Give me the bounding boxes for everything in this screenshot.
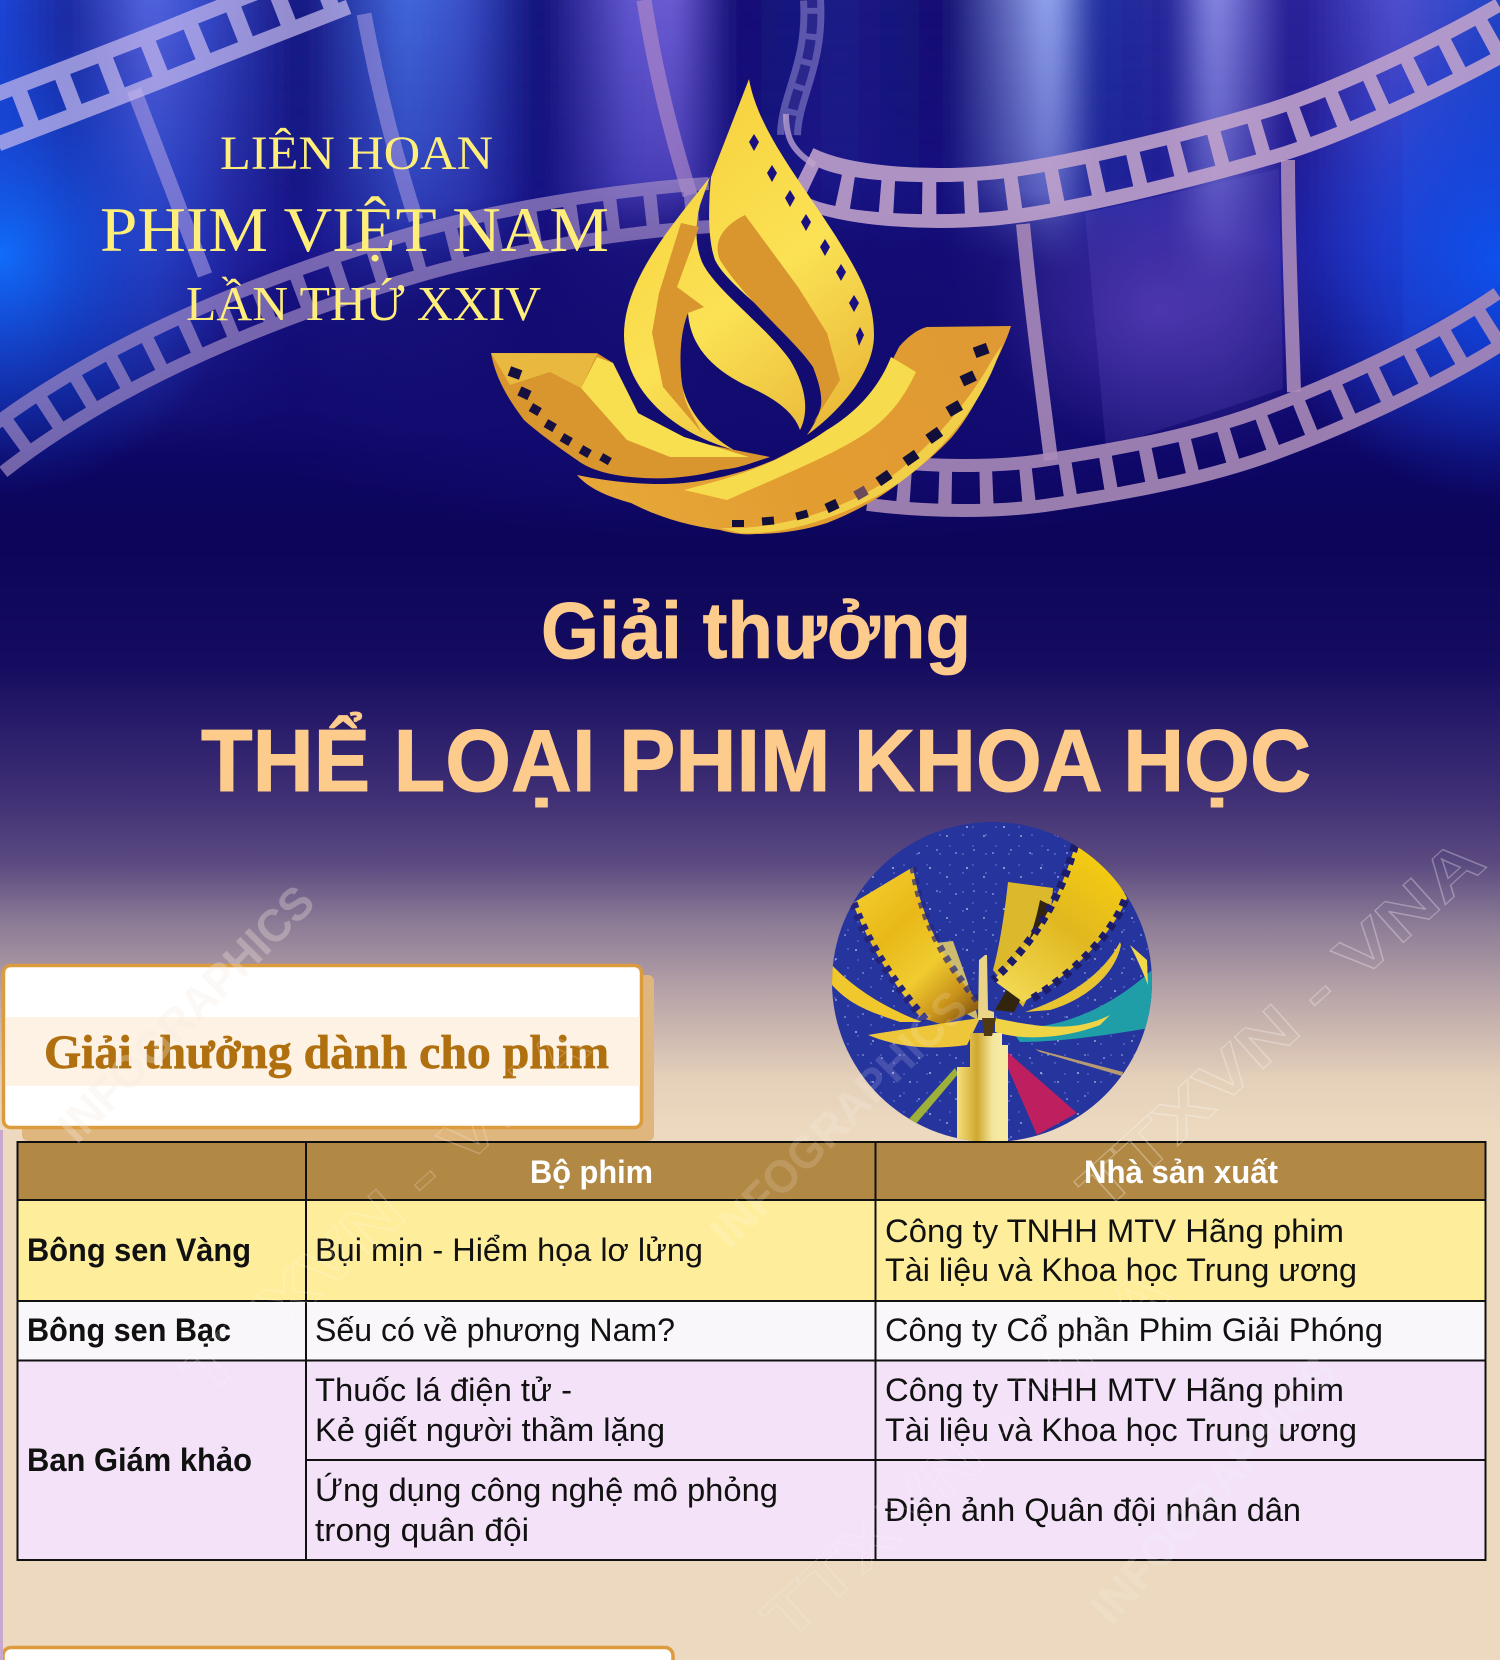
heading band — [6, 1017, 640, 1086]
watermark: INFOGRAPHICS and TTXVN - VNA: INFOGRAPHICS — [47, 875, 324, 1152]
red light beam — [1008, 1052, 1077, 1135]
green light beam — [908, 1068, 958, 1125]
watermark: INFOGRAPHICS and TTXVN - VNA: TTXVN - VNA — [750, 1255, 1183, 1654]
festival name text — [100, 127, 609, 331]
panel shadow — [22, 975, 654, 1141]
row: Ban Giám khảo: Thuốc lá điện tử - — [315, 1372, 572, 1408]
row: Bông sen Bạc — [17, 1301, 1486, 1360]
left lotus petal — [491, 353, 770, 478]
teal ribbon — [1010, 970, 1155, 1042]
watermark: INFOGRAPHICS and TTXVN - VNA: INFOGRAPHICS — [1080, 1346, 1346, 1633]
banner: film festival curtain with film strips — [0, 0, 1500, 580]
lower left film wing — [868, 1018, 980, 1048]
row: Bông sen Vàng: Bông sen Vàng — [27, 1232, 251, 1268]
bottom and right lotus petal — [577, 326, 1011, 534]
row: Ban Giám khảo: Kẻ giết người thầm lặng — [315, 1412, 665, 1448]
row: Bông sen Vàng: Công ty TNHH MTV Hãng phim — [885, 1213, 1344, 1249]
big left film — [853, 867, 983, 1025]
panel box — [4, 966, 642, 1128]
watermark: INFOGRAPHICS and TTXVN - VNA — [47, 825, 1498, 1654]
watermark: INFOGRAPHICS and TTXVN - VNA: INFOGRAPHICS — [700, 980, 977, 1257]
small right film — [993, 882, 1053, 1007]
icon: golden lotus festival logo — [491, 79, 1011, 534]
row: Bông sen Vàng — [17, 1200, 1486, 1301]
brown streak — [1035, 1049, 1123, 1076]
table header row: Bộ phim — [530, 1154, 653, 1190]
left edge strip — [0, 1130, 3, 1660]
flame left petal — [624, 177, 805, 450]
panel: awards section heading — [4, 966, 654, 1141]
illustration: film flower tower circle — [830, 820, 1155, 1145]
panel: next section box cut off at bottom — [3, 1648, 673, 1660]
row: Ban Giám khảo: Ban Giám khảo — [27, 1442, 252, 1478]
left film band — [832, 965, 922, 1022]
heading: LIÊN HOAN: LIÊN HOAN — [220, 127, 493, 180]
row: Bông sen Bạc: Bông sen Bạc — [27, 1312, 231, 1348]
flame right petal — [709, 79, 874, 435]
tower — [957, 955, 1008, 1143]
table header row — [17, 1142, 1486, 1200]
heading: LẦN THỨ XXIV: LẦN THỨ XXIV — [186, 276, 541, 331]
big right film — [993, 845, 1127, 1002]
row: Ban Giám khảo: trong quân đội — [315, 1512, 529, 1548]
table header row: Nhà sản xuất — [1084, 1154, 1278, 1190]
row: Bông sen Bạc: Công ty Cổ phần Phim Giải Phóng — [885, 1312, 1383, 1348]
row: Ban Giám khảo: Tài liệu và Khoa học Trung ương — [885, 1412, 1357, 1448]
heading: PHIM VIỆT NAM: PHIM VIỆT NAM — [100, 194, 609, 265]
lower right film band — [1025, 942, 1121, 1012]
row: Ban Giám khảo: Điện ảnh Quân đội nhân dân — [885, 1492, 1301, 1528]
watermark: INFOGRAPHICS and TTXVN - VNA: TTXVN - VNA — [1065, 825, 1498, 1224]
table: awards winners — [17, 1142, 1486, 1560]
title: Giải thưởng: Giải thưởng — [541, 586, 971, 675]
title: THỂ LOẠI PHIM KHOA HỌC: THỂ LOẠI PHIM KHOA HỌC — [201, 711, 1311, 810]
small left film — [936, 941, 978, 1020]
row: Bông sen Vàng: Bụi mịn - Hiểm họa lơ lửng — [315, 1232, 703, 1268]
heading: Giải thưởng dành cho phim: Giải thưởng dành cho phim — [44, 1026, 609, 1079]
watermark: INFOGRAPHICS and TTXVN - VNA: TTXVN - VNA — [170, 1010, 603, 1409]
row: Ban Giám khảo: Ứng dụng công nghệ mô phỏng — [315, 1472, 778, 1508]
row: Bông sen Bạc: Sếu có về phương Nam? — [315, 1312, 675, 1348]
row: Ban Giám khảo: Công ty TNHH MTV Hãng phim — [885, 1372, 1344, 1408]
row: Ban Giám khảo — [17, 1360, 1486, 1560]
row: Bông sen Vàng: Tài liệu và Khoa học Trung ương — [885, 1252, 1357, 1288]
